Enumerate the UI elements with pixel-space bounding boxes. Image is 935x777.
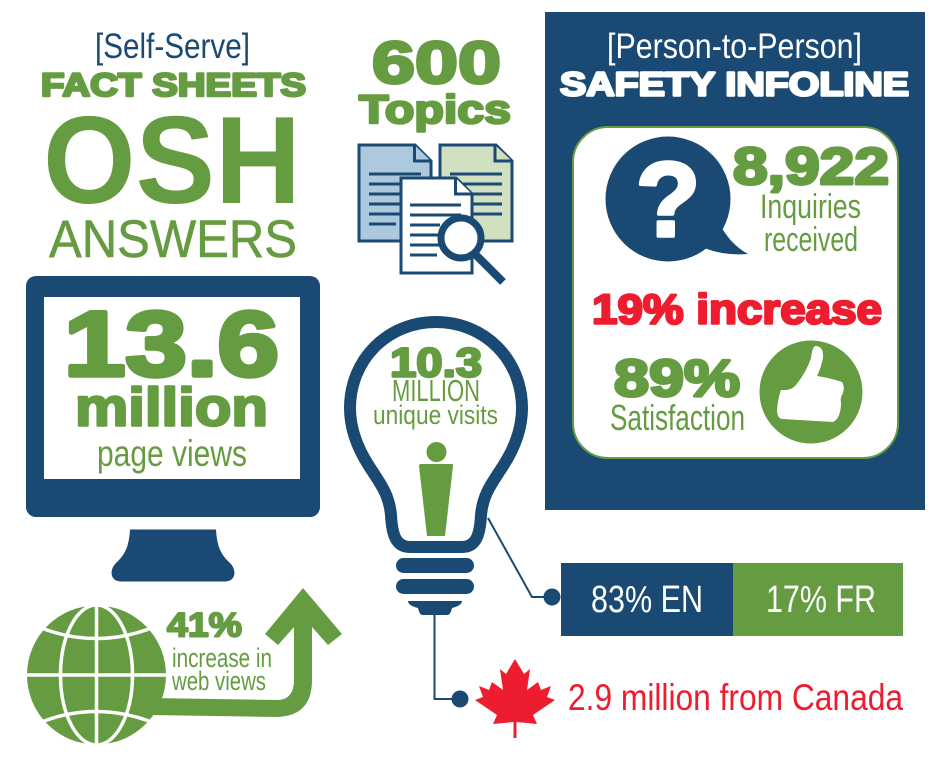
stat: 8,922 inquiries received: Inquiries bbox=[760, 188, 861, 226]
icon: question speech bubble: ? bbox=[636, 141, 700, 259]
stat: 13.6 million page views: 13.6 bbox=[64, 294, 279, 396]
heading: person-to-person safety infoline: [Person-to-Person] bbox=[607, 27, 862, 66]
stat: 8,922 inquiries received: 8,922 bbox=[733, 138, 889, 196]
stat: 10.3 million unique visits: 10.3 bbox=[390, 340, 482, 386]
stat: 600 topics: Topics bbox=[359, 88, 511, 132]
heading: self-serve fact sheets OSH answers bbox=[41, 27, 306, 269]
stat: 19% increase: 19% increase bbox=[592, 286, 882, 332]
stat: 89% satisfaction: Satisfaction bbox=[610, 397, 745, 438]
stat: 41% increase in web views: increase in bbox=[172, 643, 272, 673]
stat: 10.3 million unique visits bbox=[373, 340, 498, 430]
connector: bulb to language bar bbox=[488, 518, 560, 606]
icon: question speech bubble bbox=[606, 136, 748, 262]
stat: 41% increase in web views: web views bbox=[171, 666, 266, 696]
card: infoline statistics bbox=[573, 127, 898, 458]
stat: 8,922 inquiries received bbox=[733, 138, 889, 259]
heading: self-serve fact sheets OSH answers: OSH bbox=[43, 92, 301, 230]
stat: 10.3 million unique visits: MILLION bbox=[392, 373, 480, 408]
heading: self-serve fact sheets OSH answers: ANSWERS bbox=[49, 210, 297, 269]
connector: bulb to Canada bbox=[434, 615, 468, 708]
stat: 13.6 million page views: page views bbox=[97, 433, 247, 474]
stat: 13.6 million page views: million bbox=[75, 378, 268, 438]
icon: documents with magnifying glass bbox=[359, 145, 512, 282]
heading: self-serve fact sheets OSH answers: FACT SHEETS bbox=[41, 67, 306, 103]
chart: language split bar: 83% EN bbox=[591, 579, 703, 621]
panel: safety infoline bbox=[545, 12, 925, 510]
icon: computer monitor with page views bbox=[26, 276, 320, 582]
chart: language split bar bbox=[561, 563, 903, 636]
icon: person bbox=[419, 442, 453, 536]
icon: maple leaf bbox=[475, 659, 555, 738]
stat: 600 topics bbox=[359, 30, 511, 132]
stat: 10.3 million unique visits: unique visits bbox=[373, 400, 498, 430]
stat: 600 topics: 600 bbox=[372, 30, 501, 96]
stat: 13.6 million page views bbox=[64, 294, 279, 474]
stat: 89% satisfaction: 89% bbox=[614, 350, 740, 408]
icon: globe with rising arrow bbox=[27, 588, 342, 745]
stat: 41% increase in web views bbox=[167, 606, 272, 696]
stat: 8,922 inquiries received: received bbox=[764, 221, 858, 259]
stat: 41% increase in web views: 41% bbox=[167, 606, 242, 644]
heading: self-serve fact sheets OSH answers: [Self-Serve] bbox=[95, 27, 250, 66]
stat: 89% satisfaction bbox=[610, 350, 745, 438]
heading: person-to-person safety infoline bbox=[560, 27, 909, 102]
icon: light bulb with unique visits bbox=[350, 322, 522, 615]
icon: thumbs up bbox=[760, 340, 862, 444]
chart: language split bar: 17% FR bbox=[766, 579, 876, 621]
heading: person-to-person safety infoline: SAFETY INFOLINE bbox=[560, 66, 909, 102]
